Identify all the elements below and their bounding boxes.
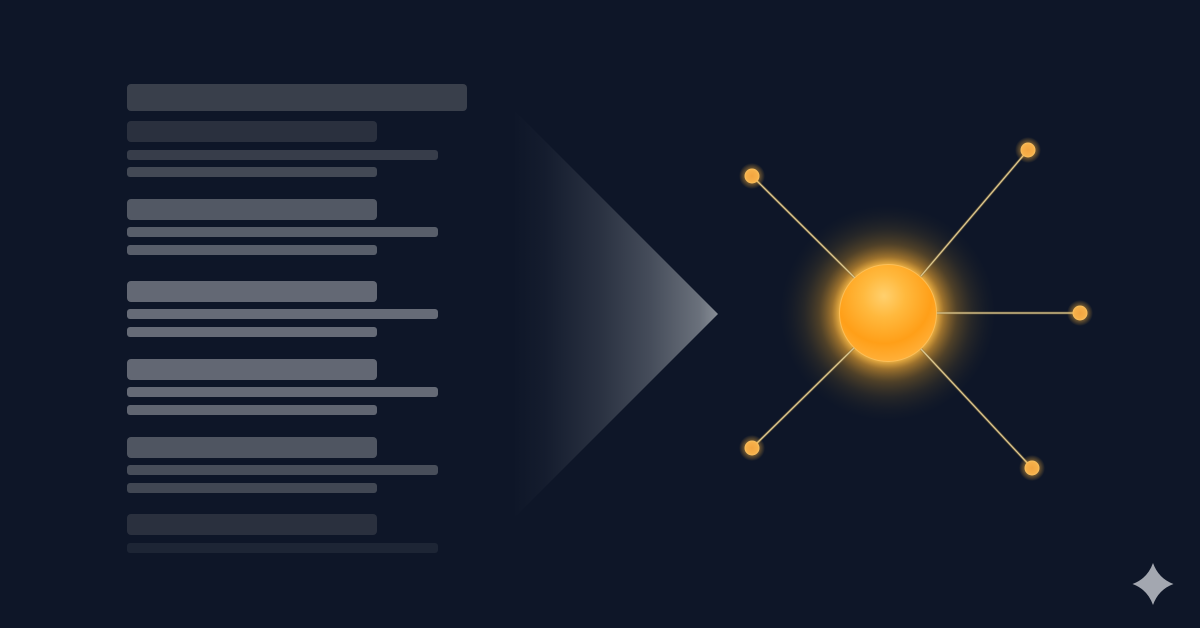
central sun sphere [840, 264, 936, 362]
section 3 bars [127, 281, 438, 337]
section 4 bars [127, 359, 438, 415]
node: upper left [739, 163, 765, 189]
node: lower right [1019, 455, 1045, 481]
icon: sparkle [1132, 563, 1174, 605]
arrow: fading triangle [512, 108, 718, 520]
section 5 bars [127, 437, 438, 493]
section 1 bars [127, 121, 438, 177]
node: right [1067, 300, 1093, 326]
node: upper right [1015, 137, 1041, 163]
section 2 bars [127, 199, 438, 255]
document title bar [127, 84, 467, 111]
panel: document of text bars [127, 84, 467, 553]
sun glow halo [780, 205, 996, 421]
section 6 bars [127, 514, 438, 553]
connector lines [752, 150, 1080, 468]
node: lower left [739, 435, 765, 461]
